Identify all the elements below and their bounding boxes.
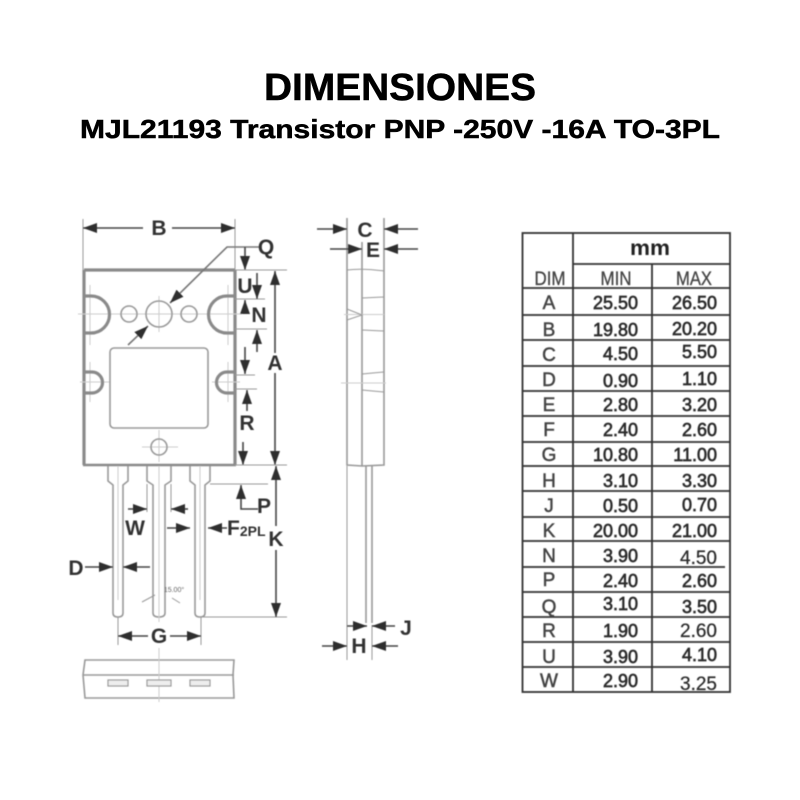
row G: G [542,445,556,466]
title: DIMENSIONES [264,67,536,109]
table header: mm [630,237,670,260]
table grid [522,233,730,692]
row U: 4.10 [682,645,717,665]
row D: 0.90 [603,371,638,391]
row C: 4.50 [603,344,638,364]
dimension R: R [239,412,255,435]
side view body [341,218,386,660]
row U [542,645,717,668]
row B: B [543,320,555,341]
dimension W: W [125,517,145,540]
row A: A [543,293,556,314]
front view drawing [68,217,287,702]
table header: MAX [676,269,712,290]
dimension R [235,347,257,465]
row K [543,521,717,542]
row W: 2.90 [603,671,638,691]
row C [542,342,717,366]
row H: 3.30 [682,471,717,491]
dimension W [125,484,188,540]
dimension A: A [267,352,283,375]
row H [542,471,717,492]
row B: 20.20 [672,319,717,339]
row N: 3.90 [603,546,638,566]
subtitle: MJL21193 Transistor PNP -250V -16A TO-3PL [80,114,720,144]
row K: 20.00 [593,521,638,541]
row J: 0.70 [682,495,717,515]
row U: 3.90 [603,647,638,667]
dimension Q: Q [258,236,274,259]
row W: 3.25 [680,674,717,695]
row N: 4.50 [680,548,717,569]
dimension K [202,465,287,617]
row A: 25.50 [593,293,638,313]
dimension Q [128,236,274,345]
dimension N [235,300,267,352]
row H: H [542,471,556,492]
row J: J [544,496,554,517]
lead angle 15 degrees [142,586,184,603]
dimension N: N [251,304,267,327]
dimension J [347,617,412,640]
dimension D: D [68,557,84,580]
table header [534,237,712,290]
row Q [542,594,717,618]
row E: E [543,395,555,416]
dimension K: K [268,528,284,551]
row P: P [543,570,555,591]
row P: 2.40 [603,571,638,591]
row G: 11.00 [673,445,717,465]
row K: 21.00 [672,521,717,541]
row Q: 3.10 [603,594,638,614]
transistor body outline [83,270,236,465]
dimension J: J [400,617,412,640]
dimension U: U [237,275,253,298]
dimension G: G [151,625,167,648]
row R [542,621,717,642]
dimension U [235,270,287,299]
row Q: 3.50 [682,597,717,617]
dimension C [317,219,418,242]
row N [542,546,717,569]
row C: C [542,345,556,366]
row P [543,570,717,591]
dimension E [330,239,418,262]
row E [543,395,717,416]
lead angle 15 degrees: 15.00° [164,586,184,594]
row F: 2.40 [603,420,638,440]
row C: 5.50 [682,342,717,362]
row D: 1.10 [682,369,717,389]
row F [543,420,717,441]
row P: 2.60 [682,571,717,591]
row D [542,369,717,391]
row A: 26.50 [672,293,717,313]
transistor pins [108,466,210,622]
row N: N [542,546,556,567]
dimension H: H [351,635,367,658]
row J: 0.50 [603,496,638,516]
dimension F 2PL: 2PL [240,523,266,539]
row W [540,671,717,695]
row H: 3.10 [603,471,638,491]
row J [544,495,717,517]
dimension B [83,217,235,270]
row F: 2.60 [682,420,717,440]
row F: F [543,420,555,441]
dimension G [118,617,201,648]
row R: 2.60 [680,621,717,642]
side view drawing [317,218,418,660]
row E: 3.20 [682,395,717,415]
bottom view of package [83,648,234,702]
row R: 1.90 [603,621,638,641]
row W: W [540,671,558,692]
row A [543,293,717,314]
row G [542,445,717,466]
table header: DIM [534,269,566,290]
row B: 19.80 [593,320,638,340]
dimension F 2PL [167,517,266,540]
table header: MIN [600,269,632,290]
dimension P: P [257,495,271,518]
dimension D [68,557,150,580]
dimension C: C [357,219,373,242]
dimensions table [522,233,730,695]
mounting holes and window [78,285,242,462]
row K: K [543,521,556,542]
dimension B: B [151,217,167,240]
row R: R [542,621,556,642]
row Q: Q [542,597,556,618]
row D: D [542,370,556,391]
row E: 2.80 [603,395,638,415]
dimension E: E [366,239,380,262]
dimension H [322,635,398,658]
row G: 10.80 [593,445,638,465]
dimension P [210,484,271,518]
dimension F 2PL: F [227,517,240,540]
row U: U [542,647,556,668]
row B [543,319,717,341]
